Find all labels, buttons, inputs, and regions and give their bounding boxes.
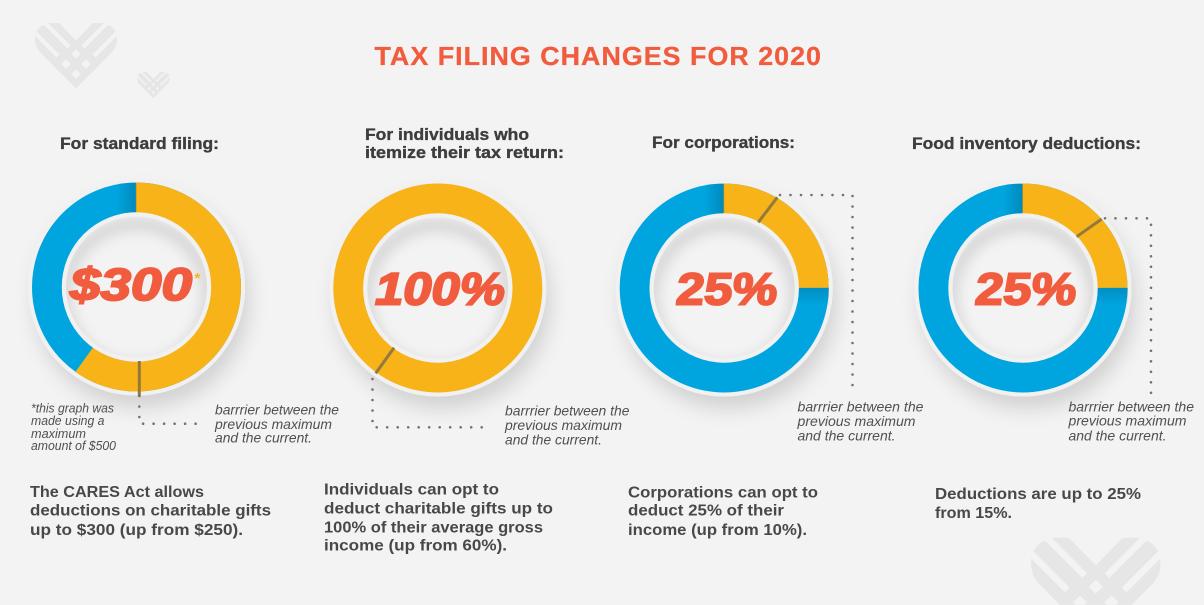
footnote: *this graph was: [31, 401, 114, 416]
barrier note: barrrier between the: [215, 401, 339, 417]
donut chart: [914, 180, 1132, 396]
dotted leader: [139, 396, 206, 424]
description: from 15%.: [935, 505, 1012, 522]
heading: For individuals who: [365, 126, 529, 144]
value: 25%: [973, 263, 1079, 314]
panel: food inventory: [912, 135, 1194, 522]
barrier note: previous maximum: [504, 417, 622, 433]
description: [935, 486, 1141, 522]
heading: For standard filing:: [60, 135, 219, 153]
description: income (up from 60%).: [324, 538, 507, 555]
barrier note: barrrier between the: [505, 403, 630, 419]
barrier note: [504, 403, 630, 448]
panel: corporations: [616, 134, 924, 539]
icon: large heart bottom right: [1023, 536, 1168, 605]
description: up to $300 (up from $250).: [30, 522, 243, 539]
value: $300: [69, 259, 192, 310]
barrier note: [796, 399, 924, 444]
barrier note: and the current.: [505, 432, 602, 448]
description: deductions on charitable gifts: [30, 503, 271, 520]
footnote: made using a: [31, 413, 104, 428]
description: 100% of their average gross: [324, 520, 543, 537]
icon: large heart top left: [30, 22, 122, 88]
panel: standard filing: [28, 135, 339, 539]
barrier note: and the current.: [1068, 428, 1166, 444]
title: TAX FILING CHANGES FOR 2020: [374, 41, 822, 71]
footnote: [31, 401, 117, 453]
heading: For corporations:: [652, 134, 795, 152]
donut chart: [616, 180, 833, 396]
description: income (up from 10%).: [628, 522, 807, 539]
footnote: maximum: [31, 426, 86, 441]
icon: small heart top left: [135, 72, 172, 98]
heading: itemize their tax return:: [365, 144, 564, 162]
dotted leader: [1105, 218, 1151, 396]
barrier note: barrrier between the: [1068, 399, 1194, 415]
description: [324, 482, 553, 555]
asterisk: *: [194, 270, 200, 287]
description: Deductions are up to 25%: [935, 486, 1141, 503]
dotted leader: [780, 195, 852, 388]
panel: individuals who itemize: [324, 126, 630, 555]
donut chart: [329, 180, 546, 396]
barrier note: barrrier between the: [798, 399, 924, 415]
description: [30, 484, 271, 539]
barrier note: previous maximum: [796, 413, 916, 429]
description: [628, 484, 818, 539]
description: Individuals can opt to: [324, 482, 499, 498]
description: The CARES Act allows: [30, 484, 204, 501]
footnote: amount of $500: [31, 438, 117, 453]
barrier note: and the current.: [215, 430, 312, 446]
donut chart: [28, 178, 245, 396]
value: 100%: [375, 263, 505, 314]
barrier note: and the current.: [798, 428, 896, 444]
heading: Food inventory deductions:: [912, 135, 1141, 153]
heading: [365, 126, 564, 162]
description: deduct charitable gifts up to: [324, 501, 553, 518]
barrier note: previous maximum: [214, 416, 332, 432]
description: Corporations can opt to: [628, 484, 818, 502]
barrier note: [1067, 399, 1194, 444]
barrier note: [214, 401, 339, 446]
barrier note: previous maximum: [1067, 413, 1187, 429]
description: deduct 25% of their: [628, 503, 784, 520]
dotted leader: [372, 379, 492, 427]
value: 25%: [674, 263, 780, 314]
